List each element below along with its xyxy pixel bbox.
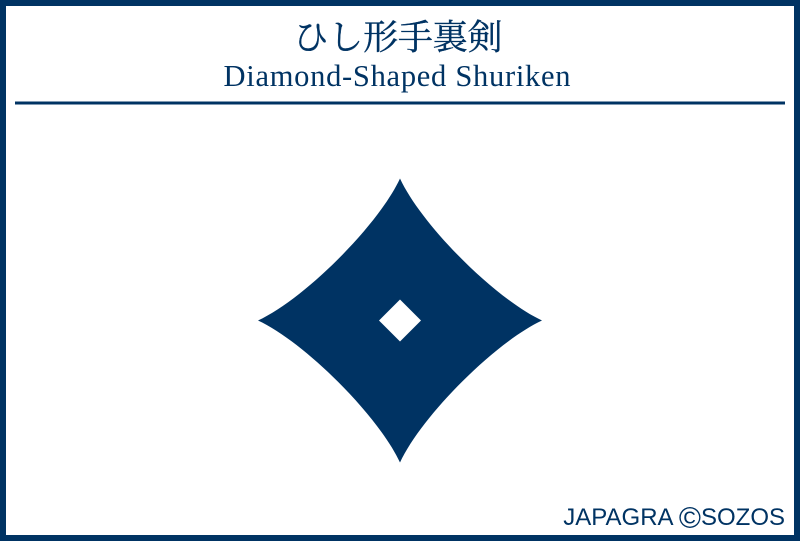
header rule xyxy=(15,102,785,104)
credit: JAPAGRA xyxy=(563,504,672,531)
title: Japanese: ひし形手裏剣 xyxy=(294,10,502,60)
credit: © xyxy=(679,502,701,535)
icon: diamond-shaped shuriken xyxy=(258,178,542,462)
credit: SOZOS xyxy=(701,504,785,531)
title: English: Diamond-Shaped Shuriken xyxy=(224,59,570,93)
